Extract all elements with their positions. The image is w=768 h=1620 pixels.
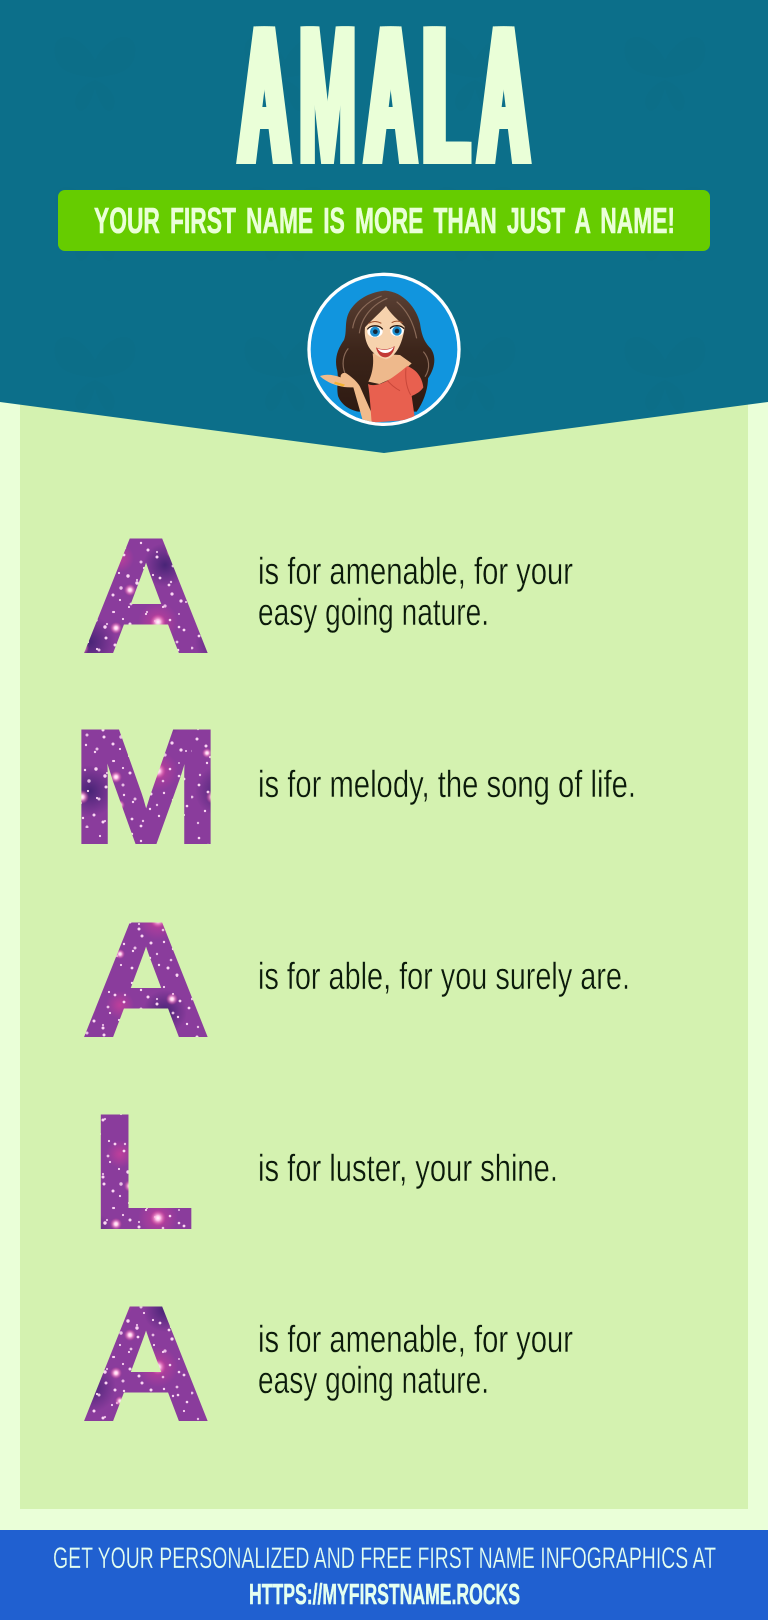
letter row 3: A: is for able, for you surely are. — [258, 956, 630, 998]
letter row 5: A: is for amenable, for your — [258, 1319, 573, 1361]
letter row 5: A: A — [82, 1274, 210, 1454]
letter row 3: A: A — [82, 890, 210, 1070]
letter row 5: A — [82, 1274, 573, 1454]
hair highlights — [343, 296, 429, 377]
avatar: smiling woman with long brown hair — [307, 273, 461, 426]
footer: HTTPS://MYFIRSTNAME.ROCKS — [249, 1579, 520, 1611]
eyes — [367, 321, 404, 337]
header background — [0, 0, 768, 453]
letter row 3: A — [82, 890, 630, 1070]
letter row 4: L: L — [91, 1082, 195, 1262]
letter row 2: M: is for melody, the song of life. — [258, 764, 636, 806]
letter row 2: M: M — [71, 696, 221, 878]
smile — [376, 346, 395, 357]
letter row 4: L — [91, 1082, 558, 1262]
letter row 1: A: A — [82, 506, 210, 686]
neck and shoulder — [368, 353, 412, 384]
arm and hand — [320, 373, 374, 423]
letter row 5: A: easy going nature. — [258, 1360, 489, 1402]
letter row 4: L: is for luster, your shine. — [258, 1148, 558, 1190]
letter row 1: A: easy going nature. — [258, 592, 489, 634]
panel: letter meanings — [20, 380, 748, 1509]
footer — [0, 1530, 768, 1620]
coral shirt — [368, 366, 423, 423]
letter row 2: M — [71, 696, 636, 878]
letter row 1: A — [82, 506, 573, 686]
subtitle banner — [58, 190, 710, 251]
face — [365, 306, 405, 359]
hair — [336, 291, 434, 412]
letter row 1: A: is for amenable, for your — [258, 551, 573, 593]
